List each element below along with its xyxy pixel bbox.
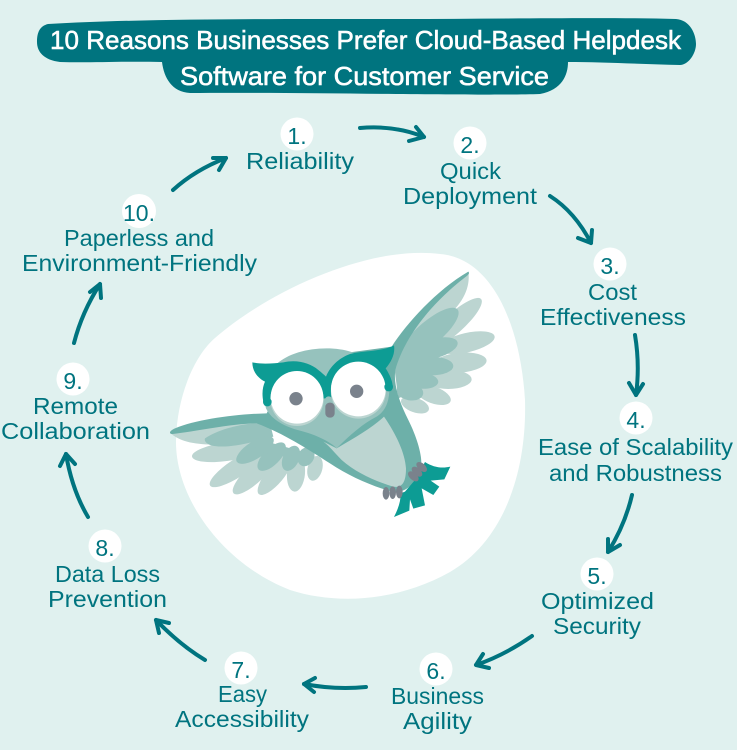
- arrow 8 to 9: [60, 454, 88, 517]
- item 6: Business Agility: 6.: [426, 658, 446, 684]
- owl beak: [325, 396, 335, 418]
- item 9: Remote Collaboration: Collaboration: [1, 418, 150, 444]
- title banner: Software for Customer Service: [180, 61, 549, 91]
- owl brows: [252, 345, 394, 406]
- arrow 5 to 6: [476, 636, 532, 668]
- item 2: Quick Deployment: Deployment: [403, 183, 538, 209]
- arrow 10 to 1: [173, 158, 226, 190]
- item 1: Reliability: 1.: [287, 123, 307, 149]
- owl tail: [394, 462, 450, 517]
- item 2: Quick Deployment: [403, 126, 538, 209]
- item 10: Paperless and Environment-Friendly: 10.: [123, 200, 155, 226]
- owl talons: [383, 460, 429, 500]
- item 9: Remote Collaboration: Remote: [33, 393, 118, 419]
- item 10: Paperless and Environment-Friendly: Paperless and: [64, 225, 214, 251]
- item 8: Data Loss Prevention: 8.: [95, 535, 115, 561]
- item 1: Reliability: [246, 118, 355, 174]
- item 7: Easy Accessibility: Easy: [218, 681, 267, 707]
- owl illustration: [170, 272, 497, 517]
- item 5: Optimized Security: [541, 558, 654, 639]
- item 2: Quick Deployment: Quick: [440, 158, 502, 184]
- title banner: 10 Reasons Businesses Prefer Cloud-Based Helpdesk: [50, 25, 682, 55]
- item 2: Quick Deployment: 2.: [460, 132, 480, 158]
- item 4: Ease of Scalability and Robustness: and Robustness: [549, 460, 722, 486]
- arrow 9 to 10: [74, 284, 101, 343]
- item 8: Data Loss Prevention: Prevention: [48, 586, 167, 612]
- item 6: Business Agility: Agility: [403, 708, 473, 734]
- item 3: Cost Effectiveness: Cost: [588, 279, 638, 305]
- item 7: Easy Accessibility: Accessibility: [175, 706, 310, 732]
- item 6: Business Agility: [391, 652, 484, 734]
- arrow 3 to 4: [629, 335, 643, 395]
- item 5: Optimized Security: Optimized: [541, 588, 654, 614]
- item 3: Cost Effectiveness: [540, 248, 686, 330]
- title banner: [37, 18, 696, 95]
- arrow 7 to 8: [156, 620, 205, 660]
- item 5: Optimized Security: 5.: [587, 563, 607, 589]
- owl body and wing arms: [170, 272, 469, 492]
- owl head: [264, 348, 389, 448]
- item 1: Reliability: Reliability: [246, 148, 355, 174]
- item 8: Data Loss Prevention: [48, 530, 167, 612]
- white blob behind owl: [176, 253, 525, 599]
- item 9: Remote Collaboration: [1, 362, 150, 444]
- item 8: Data Loss Prevention: Data Loss: [55, 561, 160, 587]
- item 5: Optimized Security: Security: [553, 613, 642, 639]
- item 4: Ease of Scalability and Robustness: Ease of Scalability: [538, 434, 734, 460]
- arrow 6 to 7: [304, 678, 366, 692]
- item 4: Ease of Scalability and Robustness: [538, 402, 734, 486]
- arrow 2 to 3: [550, 196, 592, 243]
- item 7: Easy Accessibility: [175, 652, 310, 732]
- arrow 4 to 5: [608, 495, 632, 552]
- item 3: Cost Effectiveness: 3.: [600, 253, 620, 279]
- owl eyes: [263, 362, 393, 426]
- item 7: Easy Accessibility: 7.: [231, 657, 251, 683]
- item 10: Paperless and Environment-Friendly: Environment-Friendly: [22, 250, 258, 276]
- owl belly: [323, 417, 406, 487]
- item 4: Ease of Scalability and Robustness: 4.: [626, 407, 646, 433]
- item 6: Business Agility: Business: [391, 683, 484, 709]
- item 9: Remote Collaboration: 9.: [63, 368, 83, 394]
- item 10: Paperless and Environment-Friendly: [22, 194, 258, 276]
- arrow 1 to 2: [360, 127, 424, 141]
- item 3: Cost Effectiveness: Effectiveness: [540, 304, 686, 330]
